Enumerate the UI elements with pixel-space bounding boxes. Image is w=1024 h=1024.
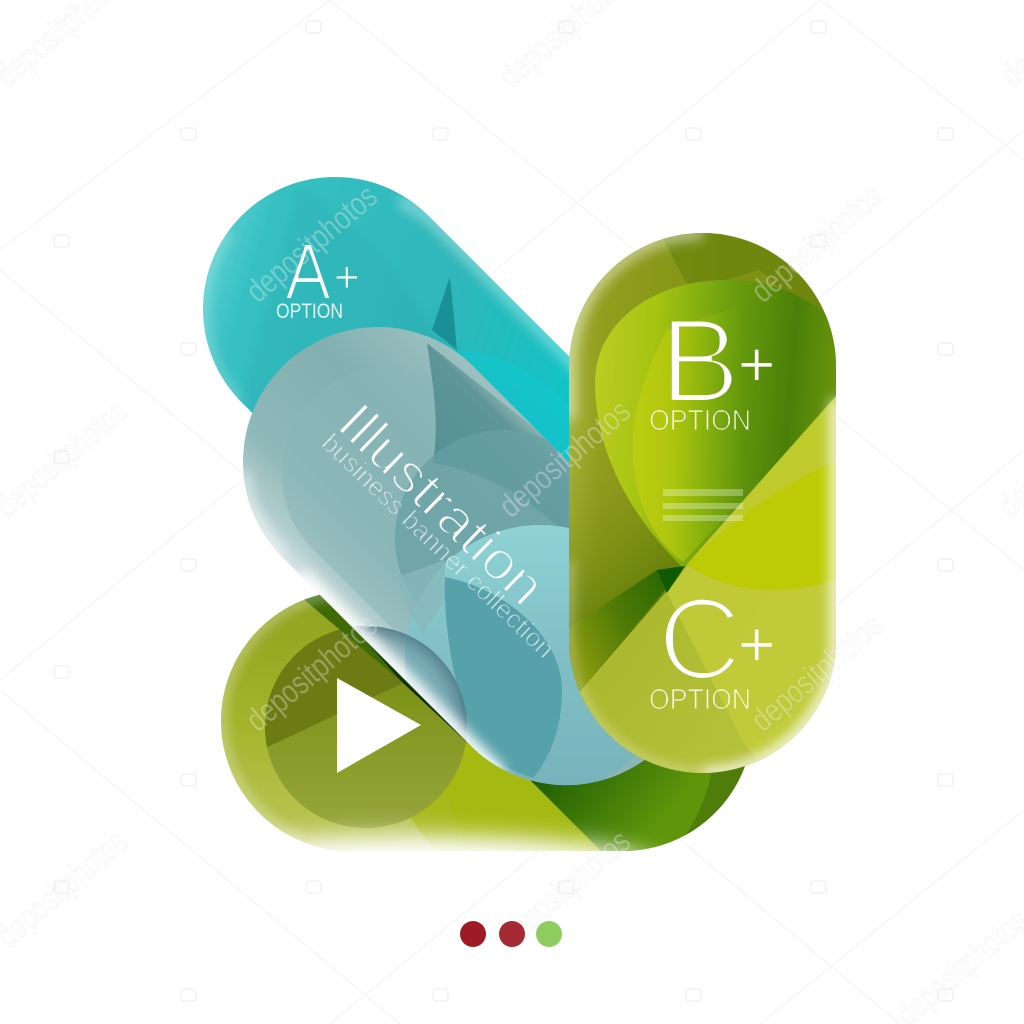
inner capsule	[283, 482, 644, 786]
label: B plus: +	[738, 328, 775, 400]
lower panel	[569, 396, 836, 773]
bottom white fade	[274, 816, 660, 851]
label: C plus: +	[738, 608, 775, 680]
label: B plus: B	[660, 294, 740, 428]
dark upper wedge	[427, 343, 569, 528]
light right wedge	[667, 564, 836, 773]
play icon	[337, 678, 421, 773]
lower left column	[569, 499, 699, 710]
darker inner band	[248, 409, 252, 412]
watermark text: depositphotos	[491, 822, 637, 954]
dark shadow stripe	[301, 588, 470, 745]
label: A option: OPTION	[276, 300, 343, 323]
lighter circle	[411, 791, 466, 850]
label: A plus: +	[334, 253, 360, 302]
upper edge glow	[394, 194, 570, 378]
watermark text: depositphotos	[743, 177, 889, 309]
label: C plus: C	[658, 574, 742, 704]
left cap fade	[243, 470, 283, 557]
label: B plus	[660, 294, 775, 428]
circle two	[395, 430, 569, 576]
dark green wedge	[530, 760, 745, 851]
inner yellow droplet	[632, 312, 728, 562]
play circle	[267, 683, 466, 828]
dark triangle	[432, 277, 457, 350]
yellow-green centre band	[448, 799, 631, 851]
watermark text: depositphotos	[238, 177, 384, 309]
darkest stripe centre	[657, 566, 685, 593]
panel: green capsule B and C	[569, 233, 837, 773]
left glow	[221, 595, 330, 840]
dark right wedge	[685, 766, 745, 836]
label: C option: OPTION	[649, 684, 751, 716]
title: Illustration: Illustration	[327, 391, 557, 617]
dark teal teardrop	[445, 577, 562, 778]
label: A plus: A	[285, 227, 332, 316]
bright yellow lens	[687, 461, 837, 590]
top right wedge	[660, 233, 836, 340]
text lines placeholder	[663, 489, 743, 521]
watermark text: depositphotos	[743, 606, 889, 738]
subtitle: business banner collection	[316, 428, 560, 664]
pagination dots	[460, 921, 562, 947]
panel: bottom olive capsule	[221, 594, 745, 851]
lower-left edge fade	[300, 576, 500, 776]
dark stripe	[569, 566, 685, 705]
watermark text: depositphotos	[238, 606, 384, 738]
droplet	[595, 280, 836, 568]
dark play wedge	[265, 630, 402, 748]
edge glows	[703, 400, 836, 773]
upper lower-panel band	[687, 396, 837, 579]
panel: grey-blue capsule	[243, 327, 645, 786]
label: B option: OPTION	[649, 405, 751, 437]
circle two lower rim	[402, 560, 445, 632]
watermark text: depositphotos	[491, 392, 637, 524]
panel: teal capsule A	[203, 177, 570, 462]
bright lower overlap	[457, 350, 569, 462]
small circle	[352, 626, 467, 740]
circle three	[405, 525, 636, 786]
